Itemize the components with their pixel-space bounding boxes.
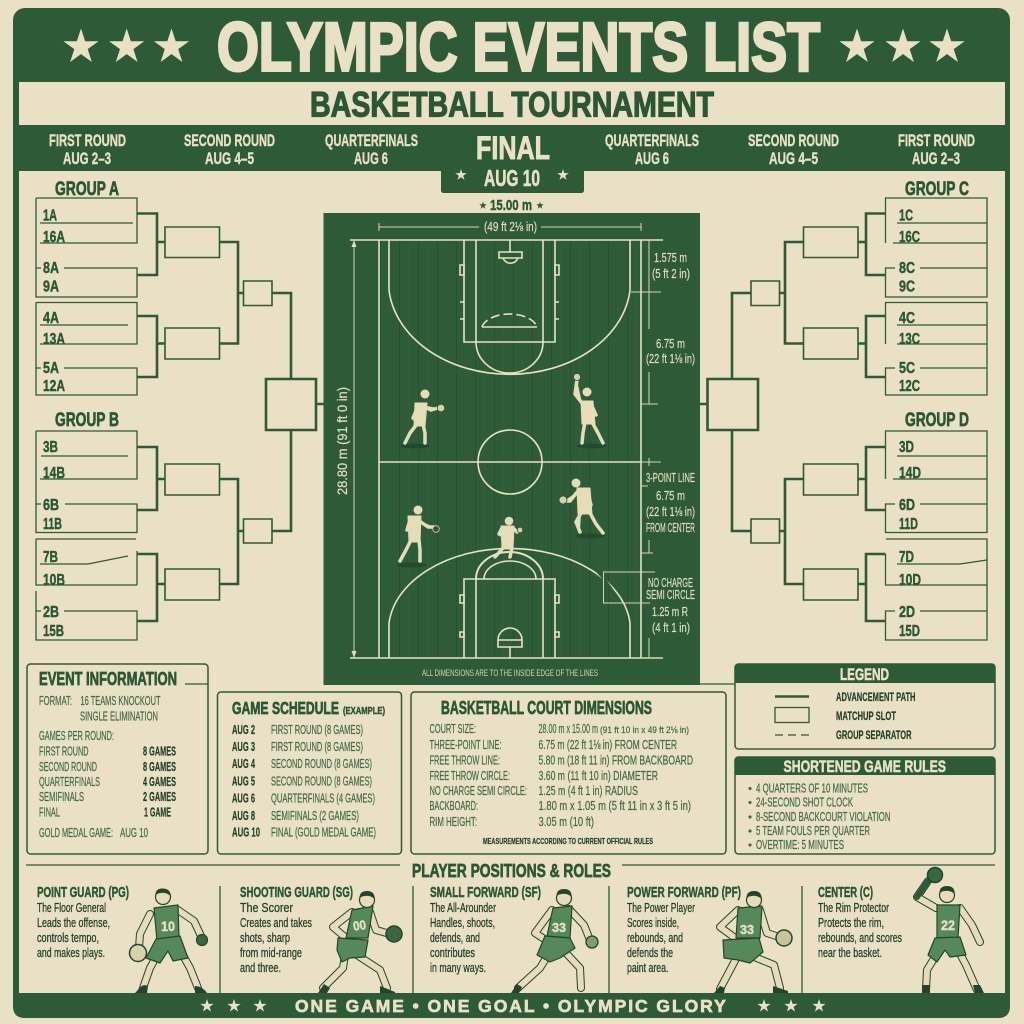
bracket: left side — [36, 179, 324, 640]
panel: event information: GAMES PER ROUND: — [39, 729, 114, 743]
text: power forward: paint area. — [627, 960, 668, 975]
group D bracket — [732, 410, 987, 640]
group B bracket: 3B — [43, 439, 58, 456]
group B bracket: 11B — [43, 516, 62, 533]
group B bracket: 7B — [43, 549, 58, 566]
court player 1 dribbling — [400, 390, 445, 448]
figure: center — [917, 868, 984, 993]
dimension: right annotations: (4 ft 1 in) — [652, 621, 690, 635]
dimension: right annotations: 3-POINT LINE — [646, 471, 695, 485]
semifinal slot right — [700, 379, 758, 430]
text: shooting guard: shots, sharp — [240, 930, 290, 945]
legend: group separator: GROUP SEPARATOR — [836, 728, 912, 742]
group C bracket: 8C — [899, 260, 915, 277]
text: shooting guard: from mid-range — [240, 945, 302, 960]
court player 5 at the arc — [495, 517, 523, 557]
bracket: right side — [700, 179, 987, 640]
court player 2 shooting — [574, 374, 607, 448]
legend: group separator — [775, 728, 912, 742]
round header band: AUG 2–3 — [63, 150, 111, 168]
panel: event information: SECOND ROUND — [39, 760, 97, 774]
three-point arc fade — [590, 565, 622, 605]
panel: game schedule: FIRST ROUND (8 GAMES) — [271, 723, 363, 737]
text: center — [818, 885, 902, 960]
heading: game schedule: GAME SCHEDULE — [232, 698, 339, 718]
text: point guard: and makes plays. — [37, 945, 105, 960]
panel: basketball court dimensions: 3.05 m (10 ft) — [538, 815, 594, 829]
group D bracket: 3D — [899, 439, 914, 456]
group D bracket: 2D — [899, 604, 915, 621]
panel: game schedule: SECOND ROUND (8 GAMES) — [271, 774, 372, 788]
panel: event information: 8 GAMES — [143, 760, 176, 774]
panel: event information: 16 TEAMS KNOCKOUT — [80, 694, 161, 708]
final tab: AUG 10 — [484, 165, 540, 191]
heading: legend: LEGEND — [840, 665, 889, 684]
legend: advancement path: ADVANCEMENT PATH — [836, 690, 916, 704]
dimension: court length — [334, 240, 356, 658]
text: shooting guard: SHOOTING GUARD (SG) — [240, 885, 353, 901]
panel: event information: FINAL — [39, 806, 60, 820]
dimension: right annotations: (5 ft 2 in) — [652, 267, 690, 281]
text: center: near the basket. — [818, 945, 882, 960]
group A bracket: 16A — [43, 229, 65, 246]
icon: banner stars left — [200, 999, 267, 1012]
panel: shortened game rules — [735, 757, 995, 854]
dimension: right annotations: (22 ft 1⅛ in) — [646, 505, 695, 519]
dimension: right annotations: 1.25 m R — [652, 605, 688, 619]
group C bracket: 16C — [899, 229, 920, 246]
panel: game schedule — [218, 692, 402, 854]
group B bracket — [36, 410, 291, 640]
group A bracket: GROUP A — [55, 179, 119, 200]
panel: basketball court dimensions: 1.25 m (4 ft 1 in) RADIUS — [538, 784, 638, 798]
panel: basketball court dimensions: 28.00 m x 15.00 m — [538, 722, 598, 736]
final tab — [441, 130, 584, 193]
text: shooting guard — [240, 885, 353, 975]
heading: shortened game rules: SHORTENED GAME RULES — [784, 757, 946, 776]
panel: basketball court dimensions: RIM HEIGHT: — [430, 815, 477, 829]
round header band: AUG 4–5 — [205, 150, 254, 168]
text: power forward: POWER FORWARD (PF) — [627, 885, 741, 901]
group D bracket: 11D — [899, 516, 918, 533]
dimension: right annotations: 6.75 m — [656, 337, 685, 351]
basketball court diagram — [324, 213, 700, 685]
dimension: right annotations: 6.75 m — [656, 489, 685, 503]
panel: event information: 4 GAMES — [143, 775, 176, 789]
group B bracket: 2B — [43, 604, 59, 621]
heading: event information: EVENT INFORMATION — [39, 669, 177, 689]
dimension: right annotations: FROM CENTER — [646, 521, 695, 535]
panel: basketball court dimensions: 1.80 m x 1.05 m (5 ft 11 in x 3 ft 5 in) — [538, 799, 691, 813]
panel: basketball court dimensions: (91 ft 10 in x 49 ft 2⅛ in) — [600, 725, 689, 736]
panel: basketball court dimensions: THREE-POINT LINE: — [430, 738, 502, 752]
panel: game schedule: QUARTERFINALS (4 GAMES) — [271, 792, 375, 806]
text: power forward: Scores inside, — [627, 915, 679, 930]
group C bracket: 13C — [899, 331, 920, 348]
group D bracket: 14D — [899, 465, 921, 482]
text: point guard: Leads the offense, — [37, 915, 110, 930]
text: small forward — [430, 885, 541, 975]
group B bracket: 10B — [43, 572, 65, 589]
round header band: QUARTERFINALS — [325, 132, 418, 150]
panel: event information: 2 GAMES — [143, 790, 176, 804]
text: small forward: defends, and — [430, 930, 480, 945]
text: center: Protects the rim, — [818, 915, 884, 930]
panel: basketball court dimensions: FREE THROW CIRCLE: — [430, 769, 510, 783]
text: point guard: controls tempo, — [37, 930, 99, 945]
group C bracket: GROUP C — [905, 179, 969, 200]
figure: shooting guard: 00 — [352, 917, 367, 934]
round header band: AUG 6 — [635, 150, 669, 168]
title text: OLYMPIC EVENTS LIST — [217, 8, 820, 86]
text: center: rebounds, and scores — [818, 930, 902, 945]
round header band: FIRST ROUND — [49, 132, 126, 150]
text: shooting guard: and three. — [240, 960, 281, 975]
text: power forward: rebounds, and — [627, 930, 683, 945]
group A bracket: 8A — [43, 260, 59, 277]
panel: basketball court dimensions: FREE THROW LINE: — [430, 754, 500, 768]
court dimensions note: MEASUREMENTS ACCORDING TO CURRENT OFFICIAL RULES — [483, 836, 653, 846]
icon: banner stars right — [757, 999, 826, 1012]
text: small forward: contributes — [430, 945, 475, 960]
panel: legend — [735, 664, 995, 749]
text: shooting guard: The Scorer — [240, 900, 294, 915]
round header band: SECOND ROUND — [748, 132, 839, 150]
subtitle: BASKETBALL TOURNAMENT — [310, 86, 714, 124]
group D bracket: GROUP D — [905, 410, 969, 431]
court player 3 ball handler — [559, 478, 605, 538]
round header band: AUG 4–5 — [769, 150, 818, 168]
round header band: SECOND ROUND — [184, 132, 275, 150]
panel: game schedule: SEMIFINALS (2 GAMES) — [271, 809, 359, 823]
panel: game schedule: AUG 10 — [232, 826, 260, 840]
figure: power forward: 33 — [740, 922, 754, 937]
group A bracket — [36, 179, 291, 395]
court footnote: ALL DIMENSIONS ARE TO THE INSIDE EDGE OF THE LINES — [422, 668, 598, 679]
panel: game schedule: AUG 6 — [232, 792, 255, 806]
panel: event information: SEMIFINALS — [39, 790, 84, 804]
decorative connector — [185, 683, 735, 685]
court width label: 15.00 m — [490, 197, 532, 214]
panel: basketball court dimensions: NO CHARGE SEMI CIRCLE: — [430, 784, 527, 798]
heading: player positions: PLAYER POSITIONS & ROLES — [412, 860, 611, 881]
group A bracket: 1A — [43, 208, 57, 224]
group C bracket: 5C — [899, 360, 915, 377]
dimension: right annotations — [603, 240, 695, 658]
dimension: top width — [379, 220, 641, 234]
panel: event information: QUARTERFINALS — [39, 775, 100, 789]
legend: matchup slot: MATCHUP SLOT — [836, 709, 896, 723]
group C bracket: 1C — [899, 208, 913, 224]
text: point guard: POINT GUARD (PG) — [37, 885, 129, 901]
final tab: FINAL — [476, 130, 550, 166]
text: small forward: SMALL FORWARD (SF) — [430, 885, 541, 901]
dimension: right annotations: NO CHARGE — [648, 576, 693, 590]
panel: event information: GOLD MEDAL GAME: — [39, 826, 113, 840]
figure: shooting guard — [318, 891, 402, 993]
text: power forward: defends the — [627, 945, 673, 960]
icon: title stars left — [63, 28, 189, 62]
round header band: QUARTERFINALS — [605, 132, 699, 150]
group B bracket: GROUP B — [55, 410, 119, 431]
panel: event information: SINGLE ELIMINATION — [80, 710, 158, 724]
group C bracket: 12C — [899, 378, 920, 395]
figure: point guard — [130, 888, 208, 993]
text: power forward: The Power Player — [627, 900, 695, 915]
panel: basketball court dimensions: 6.75 m (22 ft 1⅛ in) FROM CENTER — [538, 738, 677, 752]
icon: title stars right — [839, 28, 965, 62]
panel: shortened game rules: 8-SECOND BACKCOURT VIOLATION — [756, 810, 890, 824]
panel: event information — [27, 664, 208, 854]
group A bracket: 13A — [43, 331, 65, 348]
group C bracket — [732, 179, 987, 395]
panel: basketball court dimensions: 5.80 m (18 ft 11 in) FROM BACKBOARD — [538, 754, 693, 768]
group D bracket: 10D — [899, 572, 921, 589]
panel: game schedule: AUG 3 — [232, 740, 255, 754]
section: player positions and roles — [26, 860, 995, 993]
dimension: court length: 28.80 m (91 ft 0 in) — [334, 387, 350, 495]
group C bracket: 9C — [899, 278, 915, 296]
group D bracket: 15D — [899, 623, 920, 640]
panel: game schedule: (EXAMPLE) — [343, 706, 385, 717]
group B bracket: 15B — [43, 623, 64, 640]
panel: game schedule: FIRST ROUND (8 GAMES) — [271, 740, 363, 754]
panel: shortened game rules: OVERTIME: 5 MINUTES — [756, 838, 844, 852]
group A bracket: 5A — [43, 360, 59, 377]
group D bracket: 6D — [899, 497, 915, 514]
panel: game schedule: AUG 8 — [232, 809, 255, 823]
panel: event information: 8 GAMES — [143, 744, 176, 758]
round header band: AUG 2–3 — [912, 150, 960, 168]
group A bracket: 9A — [43, 278, 59, 296]
group C bracket: 4C — [899, 310, 915, 327]
group A bracket: 4A — [43, 310, 59, 327]
heading: court dimensions: BASKETBALL COURT DIMENSIONS — [441, 698, 652, 718]
panel: basketball court dimensions — [411, 692, 726, 854]
dimension: right annotations: (22 ft 1⅛ in) — [646, 352, 695, 366]
panel: game schedule: AUG 2 — [232, 723, 255, 737]
figure: point guard: 10 — [161, 918, 175, 934]
panel: basketball court dimensions: BACKBOARD: — [430, 799, 478, 813]
panel: game schedule: AUG 4 — [232, 757, 255, 771]
title banner — [63, 8, 965, 86]
panel: game schedule: AUG 5 — [232, 774, 255, 788]
text: small forward: The All-Arounder — [430, 900, 496, 915]
figure: power forward — [714, 891, 792, 993]
panel: shortened game rules: 4 QUARTERS OF 10 MINUTES — [756, 782, 868, 796]
court player 4 dribbling — [397, 506, 439, 568]
banner slogan: ONE GAME • ONE GOAL • OLYMPIC GLORY — [295, 996, 730, 1016]
text: center: The Rim Protector — [818, 900, 889, 915]
panel: basketball court dimensions: 3.60 m (11 ft 10 in) DIAMETER — [538, 769, 658, 783]
panel: event information: AUG 10 — [120, 826, 148, 840]
text: small forward: in many ways. — [430, 960, 486, 975]
panel: game schedule: SECOND ROUND (8 GAMES) — [271, 757, 372, 771]
text: shooting guard: Creates and takes — [240, 915, 312, 930]
panel: shortened game rules: 5 TEAM FOULS PER QUARTER — [756, 824, 870, 838]
panel: event information: FORMAT: — [39, 694, 72, 708]
group A bracket: 12A — [43, 378, 65, 395]
panel: basketball court dimensions: COURT SIZE: — [430, 722, 476, 736]
court lines — [350, 240, 663, 658]
legend: matchup slot — [775, 708, 896, 723]
round header band — [49, 132, 975, 168]
text: small forward: Handles, shoots, — [430, 915, 495, 930]
figure: center: 22 — [941, 917, 955, 933]
panel: game schedule: FINAL (GOLD MEDAL GAME) — [271, 826, 376, 840]
round header band: FIRST ROUND — [898, 132, 975, 150]
dimension: right annotations: 1.575 m — [654, 251, 687, 265]
group B bracket: 14B — [43, 465, 65, 482]
bottom banner — [13, 993, 1010, 1018]
panel: shortened game rules: 24-SECOND SHOT CLOCK — [756, 796, 853, 810]
semifinal slot left — [266, 379, 324, 430]
round header band: AUG 6 — [354, 150, 388, 168]
dimension: right annotations: SEMI CIRCLE — [646, 588, 695, 602]
text: power forward — [627, 885, 741, 975]
panel: event information: FIRST ROUND — [39, 744, 88, 758]
dimension: top width: (49 ft 2⅛ in) — [484, 220, 537, 234]
group D bracket: 7D — [899, 549, 914, 566]
text: point guard: The Floor General — [37, 900, 106, 915]
text: center: CENTER (C) — [818, 885, 873, 901]
figure: small forward — [511, 889, 598, 993]
group B bracket: 6B — [43, 497, 59, 514]
figure: small forward: 33 — [552, 920, 566, 935]
text: point guard — [37, 885, 129, 960]
panel: event information: 1 GAME — [144, 806, 171, 820]
